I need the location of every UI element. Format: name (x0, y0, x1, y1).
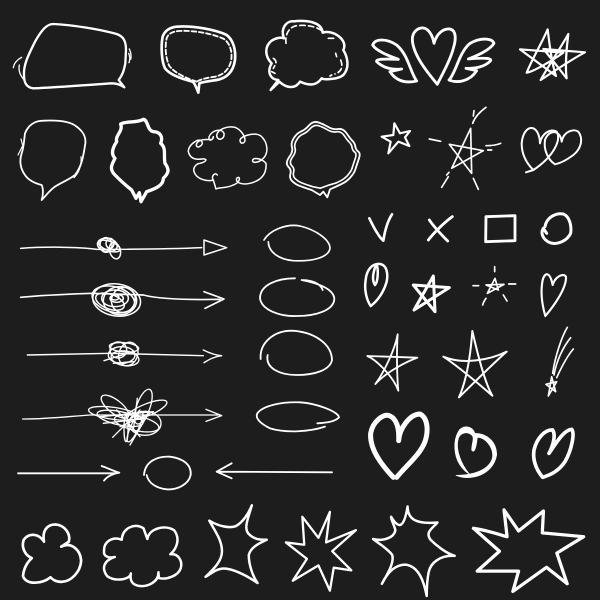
speech bubble: stitched (162, 26, 235, 93)
double hearts (522, 128, 581, 172)
speech bubble: large round with ticks (18, 120, 85, 200)
thought cloud with loops (188, 127, 267, 189)
cloud 1 (23, 524, 81, 583)
center circle (144, 457, 191, 489)
small star (382, 123, 410, 153)
narrow heart (542, 274, 566, 316)
panel: brushed hearts (371, 414, 573, 478)
cross mark (428, 217, 452, 241)
arrow 2 with big knot (21, 281, 224, 319)
curled heart (455, 427, 497, 478)
burst 1 (206, 505, 267, 583)
brushed heart (534, 429, 573, 477)
wavy double-line frame (287, 122, 360, 197)
thought cloud with dashes (266, 21, 347, 90)
thin star (367, 334, 417, 391)
check mark (369, 214, 392, 241)
arrow pointing right (18, 466, 119, 481)
oval 2 (260, 278, 334, 316)
arrow 1 with small knot (21, 237, 227, 260)
scribble double star (520, 29, 585, 80)
burst 2 (286, 512, 356, 591)
speech bubble: rounded box with ticks (13, 24, 131, 88)
square (486, 216, 515, 242)
tiny star with rays (473, 267, 516, 305)
panel: arrows and ovals (18, 225, 339, 489)
panel: marks, stars and hearts (365, 214, 573, 397)
star with rays (429, 107, 501, 189)
winged heart (373, 28, 494, 84)
cloud 2 (104, 526, 181, 586)
burst 4 (473, 510, 584, 591)
panel: clouds and bursts (23, 505, 584, 596)
speech bubble: thick wavy (111, 119, 168, 202)
small looped heart (365, 264, 387, 306)
arrow 3 with knot (27, 340, 222, 368)
big heart (371, 414, 427, 477)
large thin star (443, 331, 507, 397)
arrow 4 with large scribble (23, 387, 222, 445)
circle (542, 214, 571, 243)
shooting star (546, 327, 573, 396)
arrow pointing left (217, 463, 332, 478)
oval 4 (257, 402, 339, 431)
sketched star (413, 276, 449, 312)
oval 1 (264, 225, 330, 261)
panel: speech bubbles, left (13, 21, 347, 202)
burst 3 (373, 506, 455, 596)
panel: top right doodles (373, 28, 585, 189)
oval 3 (261, 331, 332, 375)
